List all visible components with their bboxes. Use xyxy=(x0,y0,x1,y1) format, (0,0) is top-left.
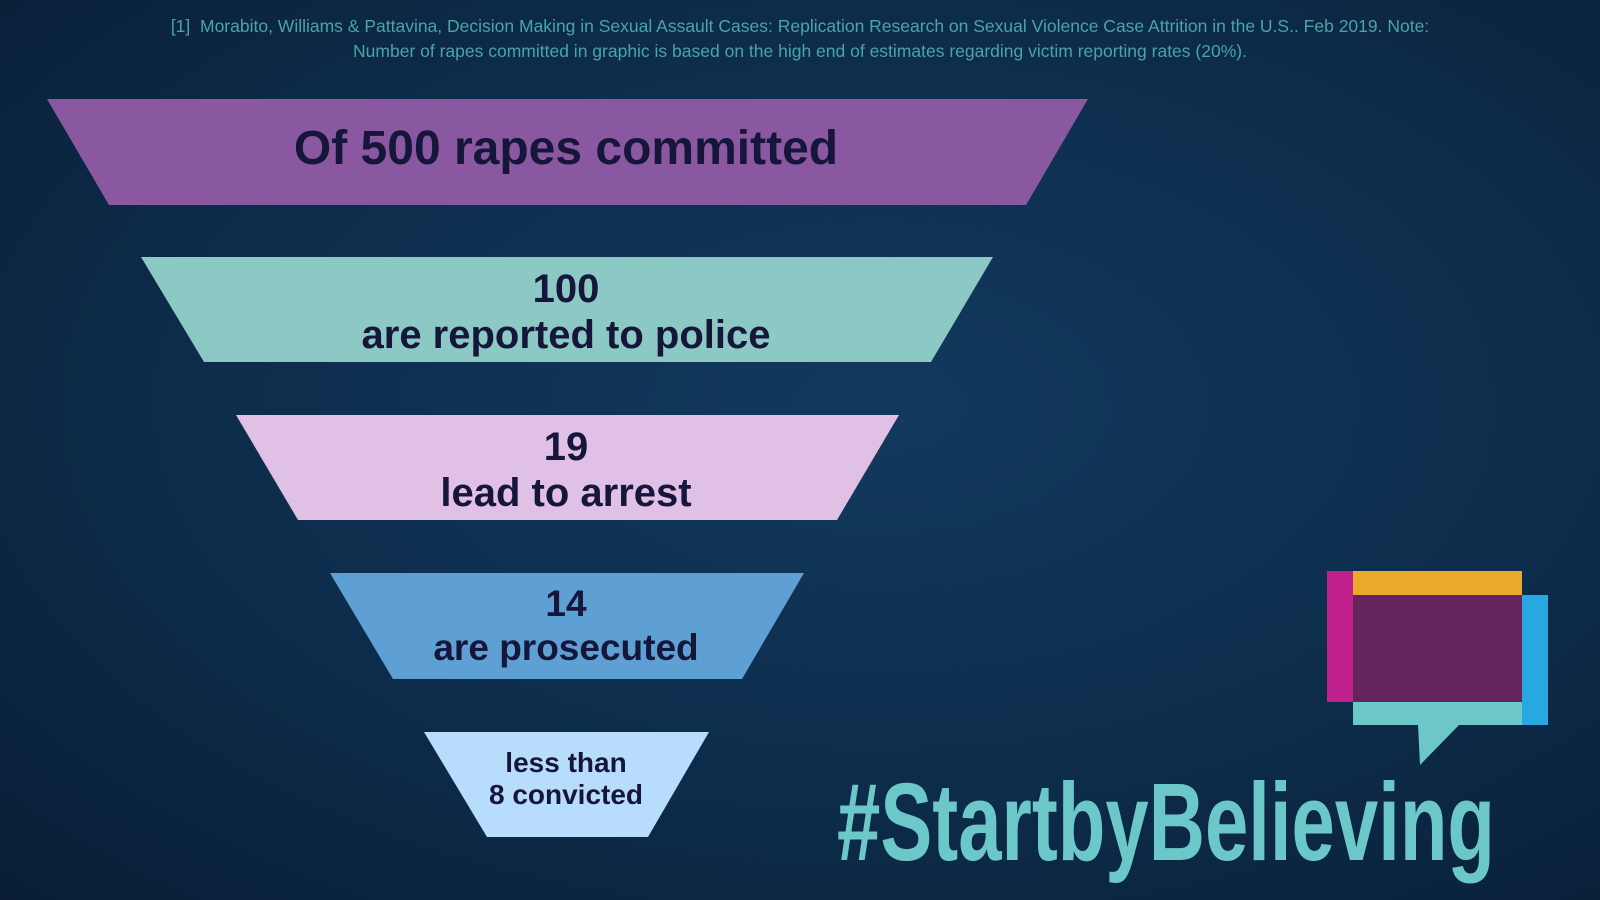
label 4: 14 xyxy=(545,583,587,624)
footnote: Number of rapes committed in graphic is based on the high end of estimates regarding victim reporting rates (20%). xyxy=(353,41,1247,61)
label 2 xyxy=(362,267,770,357)
funnel level 4 xyxy=(330,573,804,679)
funnel level 2 xyxy=(141,257,993,362)
label 3 xyxy=(440,425,692,515)
funnel level 1 xyxy=(47,99,1088,205)
label 4 xyxy=(433,583,699,668)
label 2: 100 xyxy=(533,267,599,311)
footnote: [1] Morabito, Williams & Pattavina, Decision Making in Sexual Assault Cases: Replication Research on Sexual Violence Case Attrition in the U.S.. Feb 2019. Note: xyxy=(171,16,1429,36)
label 3: lead to arrest xyxy=(440,471,692,515)
label 5: less than xyxy=(505,747,627,778)
label 3: 19 xyxy=(544,425,588,469)
label 1: Of 500 rapes committed xyxy=(294,122,838,175)
label 4: are prosecuted xyxy=(433,627,699,668)
funnel level 5 xyxy=(424,732,709,837)
funnel level 3 xyxy=(236,415,899,520)
label 5 xyxy=(489,747,643,810)
footnote xyxy=(171,16,1429,61)
label 5: 8 convicted xyxy=(489,779,643,810)
logo: speech bubble xyxy=(1327,571,1548,765)
label 2: are reported to police xyxy=(362,313,770,357)
